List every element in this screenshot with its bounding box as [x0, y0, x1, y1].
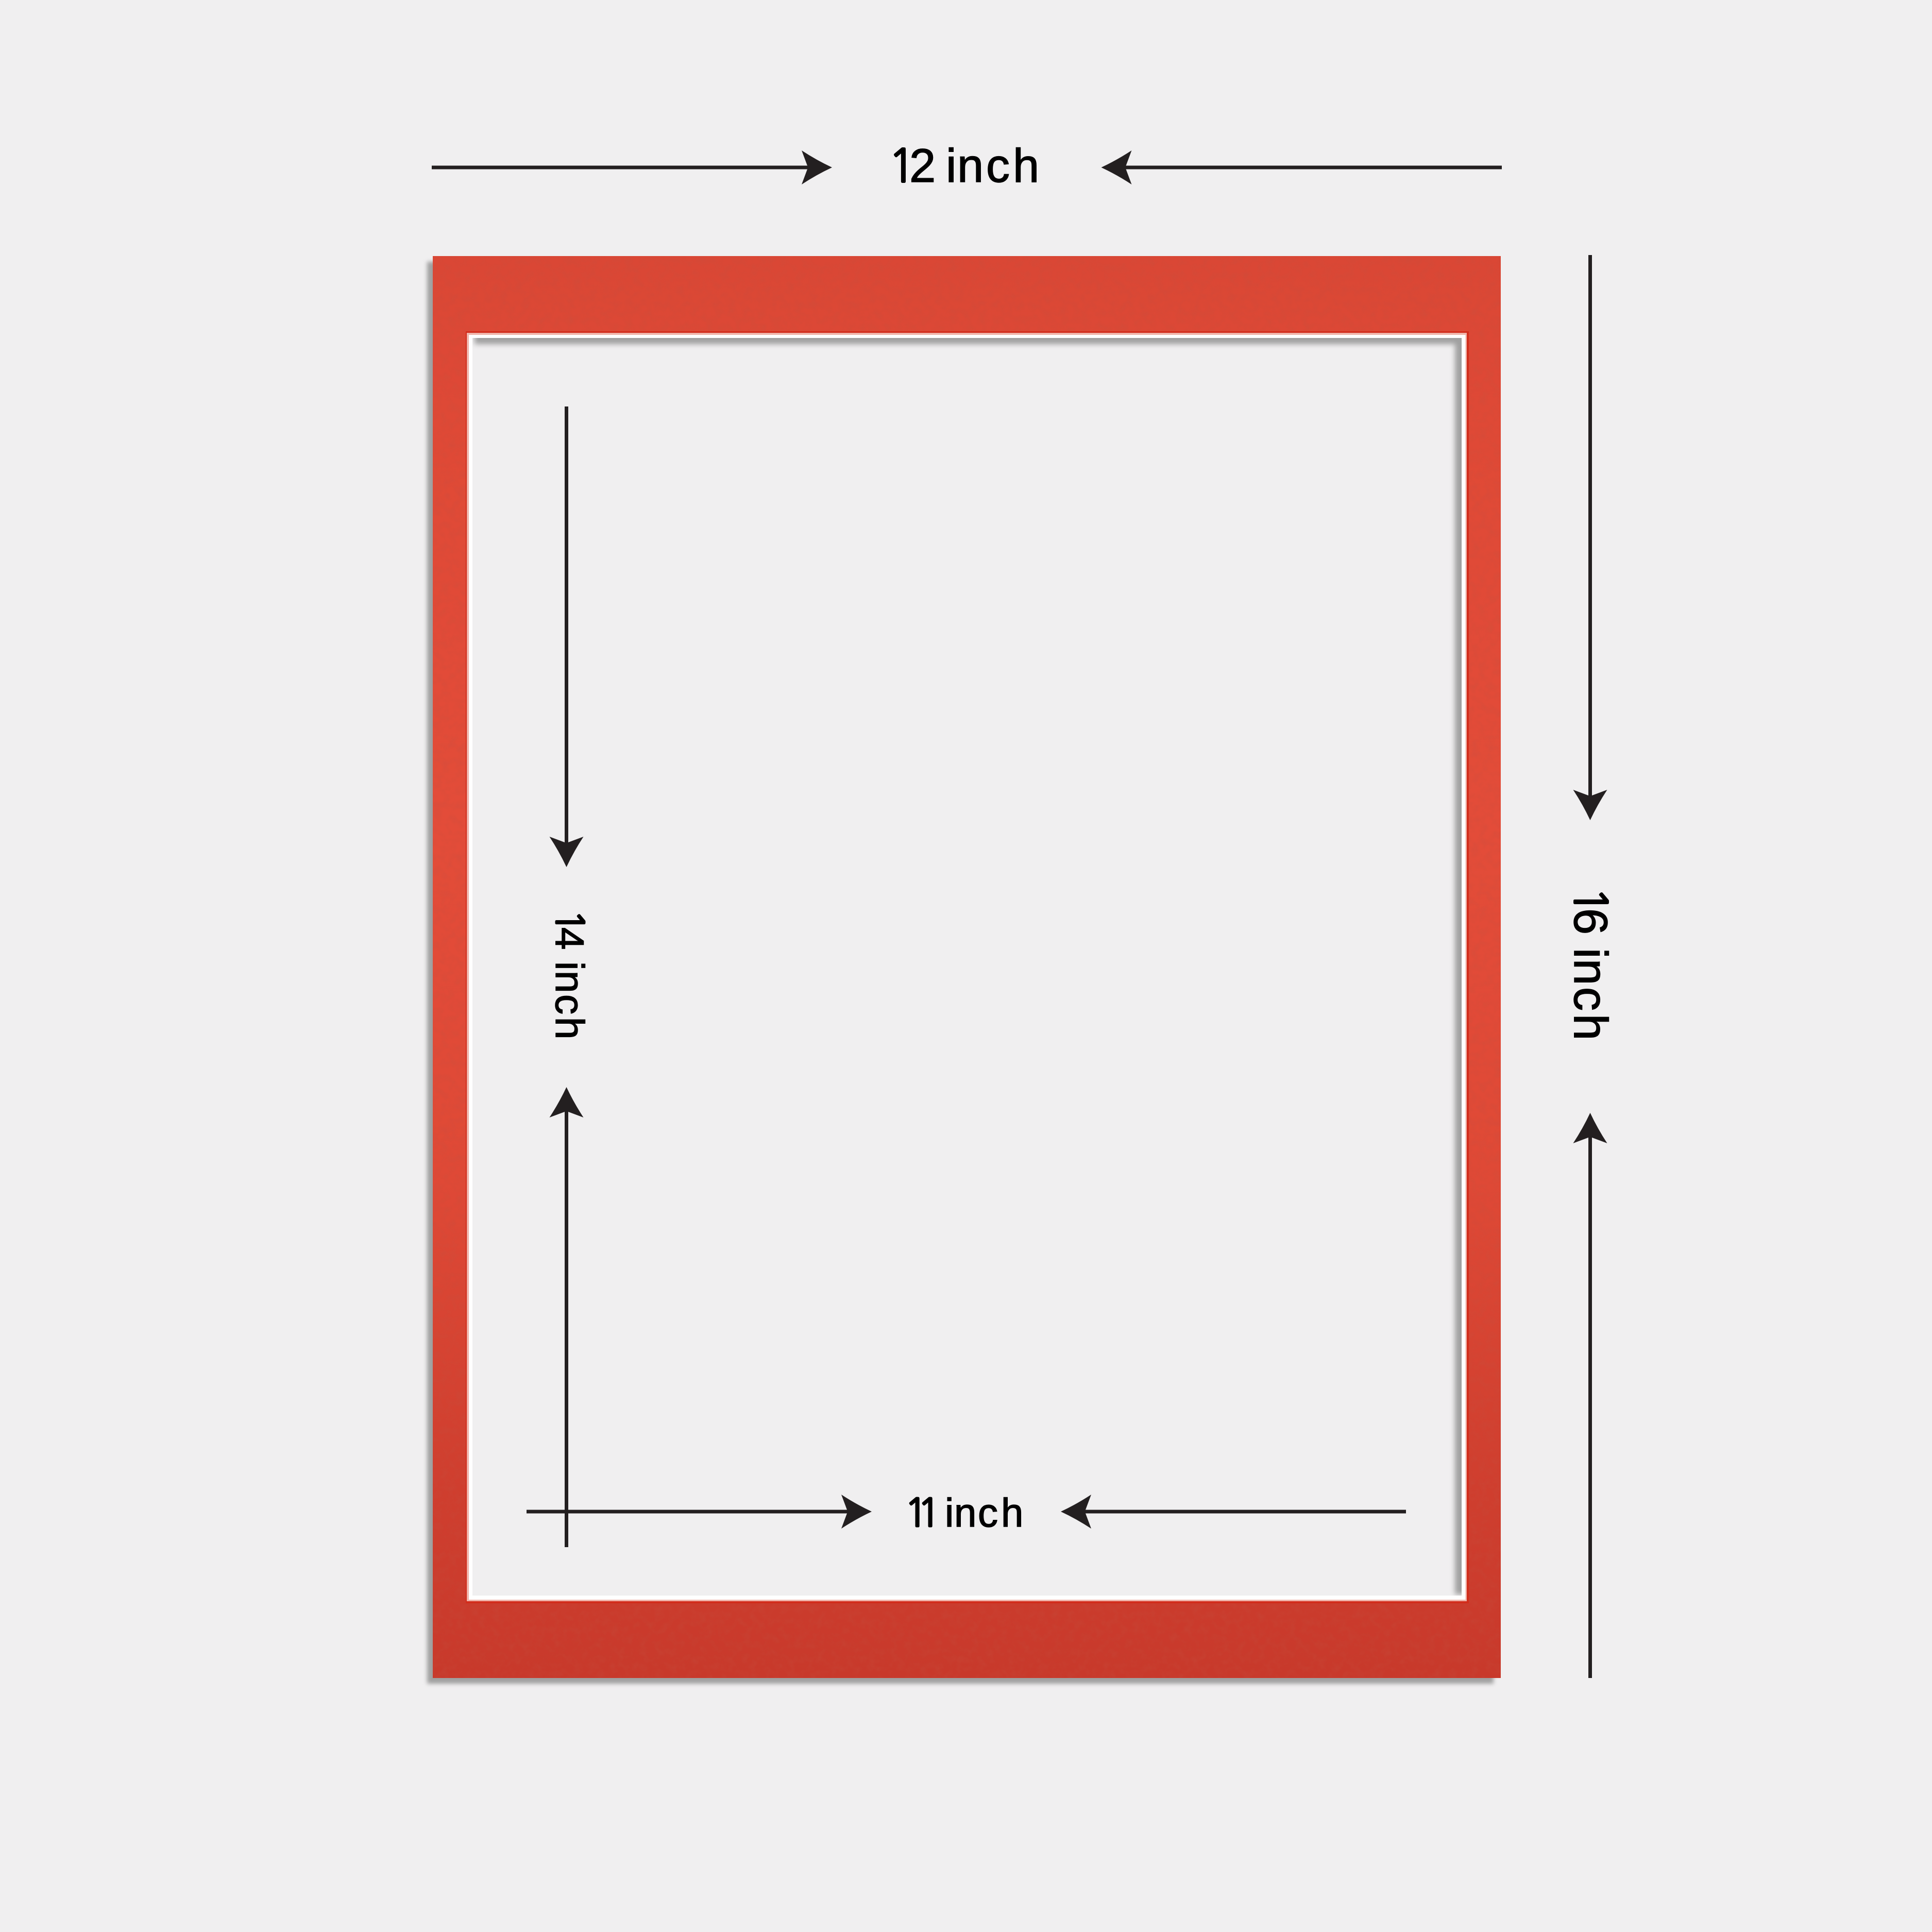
dimension: 11 inch opening width — [527, 1490, 1406, 1535]
bottom arrowhead — [549, 1087, 583, 1117]
label: 12 inch: 2 inch — [909, 140, 1039, 192]
left arrowhead — [802, 150, 832, 184]
top arrowhead — [1573, 790, 1607, 820]
dimension: 12 inch outer width — [432, 140, 1502, 192]
panel: red mat board — [427, 256, 1501, 1684]
label: 11 inch: 11 — [905, 1494, 941, 1532]
top line — [1588, 255, 1592, 801]
infographic canvas — [425, 147, 1609, 1686]
mat paper texture — [433, 256, 1501, 1678]
mat drop shadow — [427, 262, 1494, 1684]
dimension: 16 inch outer height — [1564, 255, 1617, 1678]
label: 16 inch: 1 — [1568, 887, 1613, 914]
bevel dark edge — [466, 331, 1469, 1603]
right arrowhead — [1101, 150, 1131, 184]
top arrowhead — [549, 837, 583, 867]
opening inner shadow — [474, 325, 1479, 1595]
label: 11 inch: inch — [935, 1490, 1023, 1535]
label: 16 inch: 6 inch — [1564, 908, 1617, 1040]
bevel pink edge — [467, 333, 1467, 1601]
right line — [1121, 166, 1502, 169]
opening interior — [472, 338, 1462, 1596]
right line — [1072, 1510, 1406, 1514]
left arrowhead — [841, 1495, 872, 1529]
bottom arrowhead — [1573, 1113, 1607, 1143]
mat board surface — [433, 256, 1501, 1678]
right arrowhead — [1061, 1495, 1091, 1529]
left line — [432, 166, 813, 169]
white bevel frame — [469, 335, 1465, 1600]
top line — [565, 406, 568, 844]
bottom line — [565, 1108, 568, 1547]
label: 14 inch: 4 inch — [547, 927, 592, 1039]
left line — [527, 1510, 861, 1514]
bottom line — [1588, 1132, 1592, 1678]
dimension: 14 inch opening height — [547, 406, 592, 1547]
label: 14 inch: 1 — [550, 909, 589, 933]
label: 12 inch: 1 — [888, 143, 916, 189]
